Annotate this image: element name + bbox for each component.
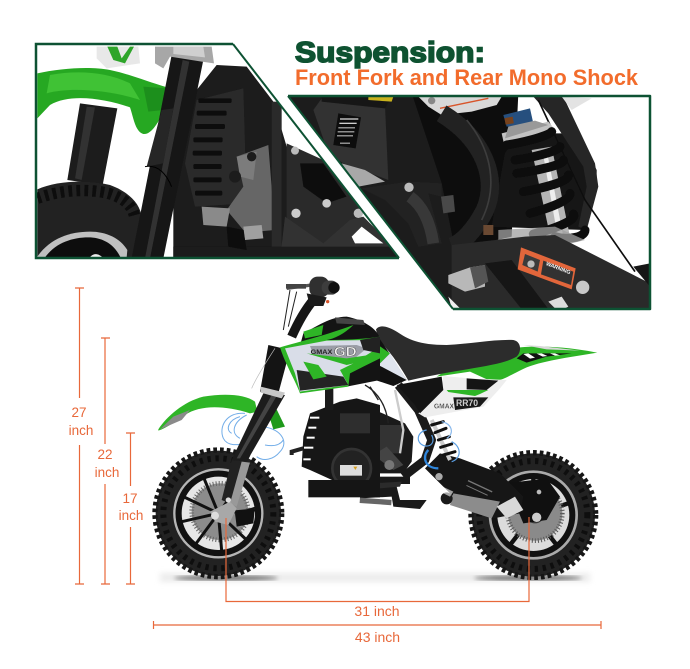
front fender xyxy=(158,395,257,431)
engine rear xyxy=(360,385,413,490)
title: Suspension: xyxy=(295,37,485,69)
dimension: 27 inch overall height: inch xyxy=(69,423,93,438)
shock xyxy=(532,147,570,243)
panel: rear mono shock close-up: WARNING xyxy=(545,261,571,276)
ground shadow xyxy=(160,573,590,582)
dimension: 17 inch seat height xyxy=(119,433,143,584)
warning label xyxy=(518,247,576,289)
blue motion swirl: rear shock xyxy=(418,422,459,468)
tank rear xyxy=(360,333,407,386)
rear wheel xyxy=(471,453,596,577)
tank and shroud: GD xyxy=(334,345,357,359)
panel: rear mono shock close-up xyxy=(285,93,655,313)
swingarm xyxy=(423,453,523,518)
tank and shroud: GMAX xyxy=(311,350,332,356)
front wheel xyxy=(155,450,282,577)
rear fender xyxy=(437,347,597,380)
main fork xyxy=(132,55,203,258)
dimension: 31 inch wheelbase xyxy=(226,517,529,619)
engine xyxy=(292,387,380,497)
panel: front fork close-up xyxy=(30,40,403,263)
dimension: 17 inch seat height: inch xyxy=(119,508,143,523)
handlebar xyxy=(283,277,340,337)
side panel xyxy=(418,376,507,417)
dimension: 17 inch seat height: 17 xyxy=(122,491,138,506)
dimension: 31 inch wheelbase: 31 inch xyxy=(354,603,400,619)
footpeg and kickstand xyxy=(360,487,427,509)
rear half of bike xyxy=(360,326,597,577)
subtitle: Front Fork and Rear Mono Shock xyxy=(295,65,638,90)
rear half of bike: RR70 xyxy=(456,398,478,408)
dimension: 43 inch overall length xyxy=(154,621,601,645)
dimension: 22 inch handlebar height xyxy=(95,338,119,584)
front fork xyxy=(210,345,290,525)
rear shock xyxy=(432,420,455,460)
dimension: 27 inch overall height: 27 xyxy=(71,405,87,420)
dimension: 43 inch overall length: 43 inch xyxy=(355,629,400,645)
blue motion swirl: fork xyxy=(222,413,284,459)
dimension: 22 inch handlebar height: 22 xyxy=(97,447,113,462)
dimension: 27 inch overall height xyxy=(69,288,93,584)
seat xyxy=(376,326,520,381)
frame plate xyxy=(492,133,597,230)
front half of bike xyxy=(155,277,380,577)
tank and shroud xyxy=(280,317,380,393)
dimension: 22 inch handlebar height: inch xyxy=(95,465,119,480)
engine xyxy=(173,65,324,257)
swingarm xyxy=(452,235,655,313)
rear half of bike: GMAX xyxy=(434,402,455,411)
tyre xyxy=(37,182,142,260)
frame rail xyxy=(398,385,432,477)
dirt bike illustration xyxy=(155,277,597,577)
